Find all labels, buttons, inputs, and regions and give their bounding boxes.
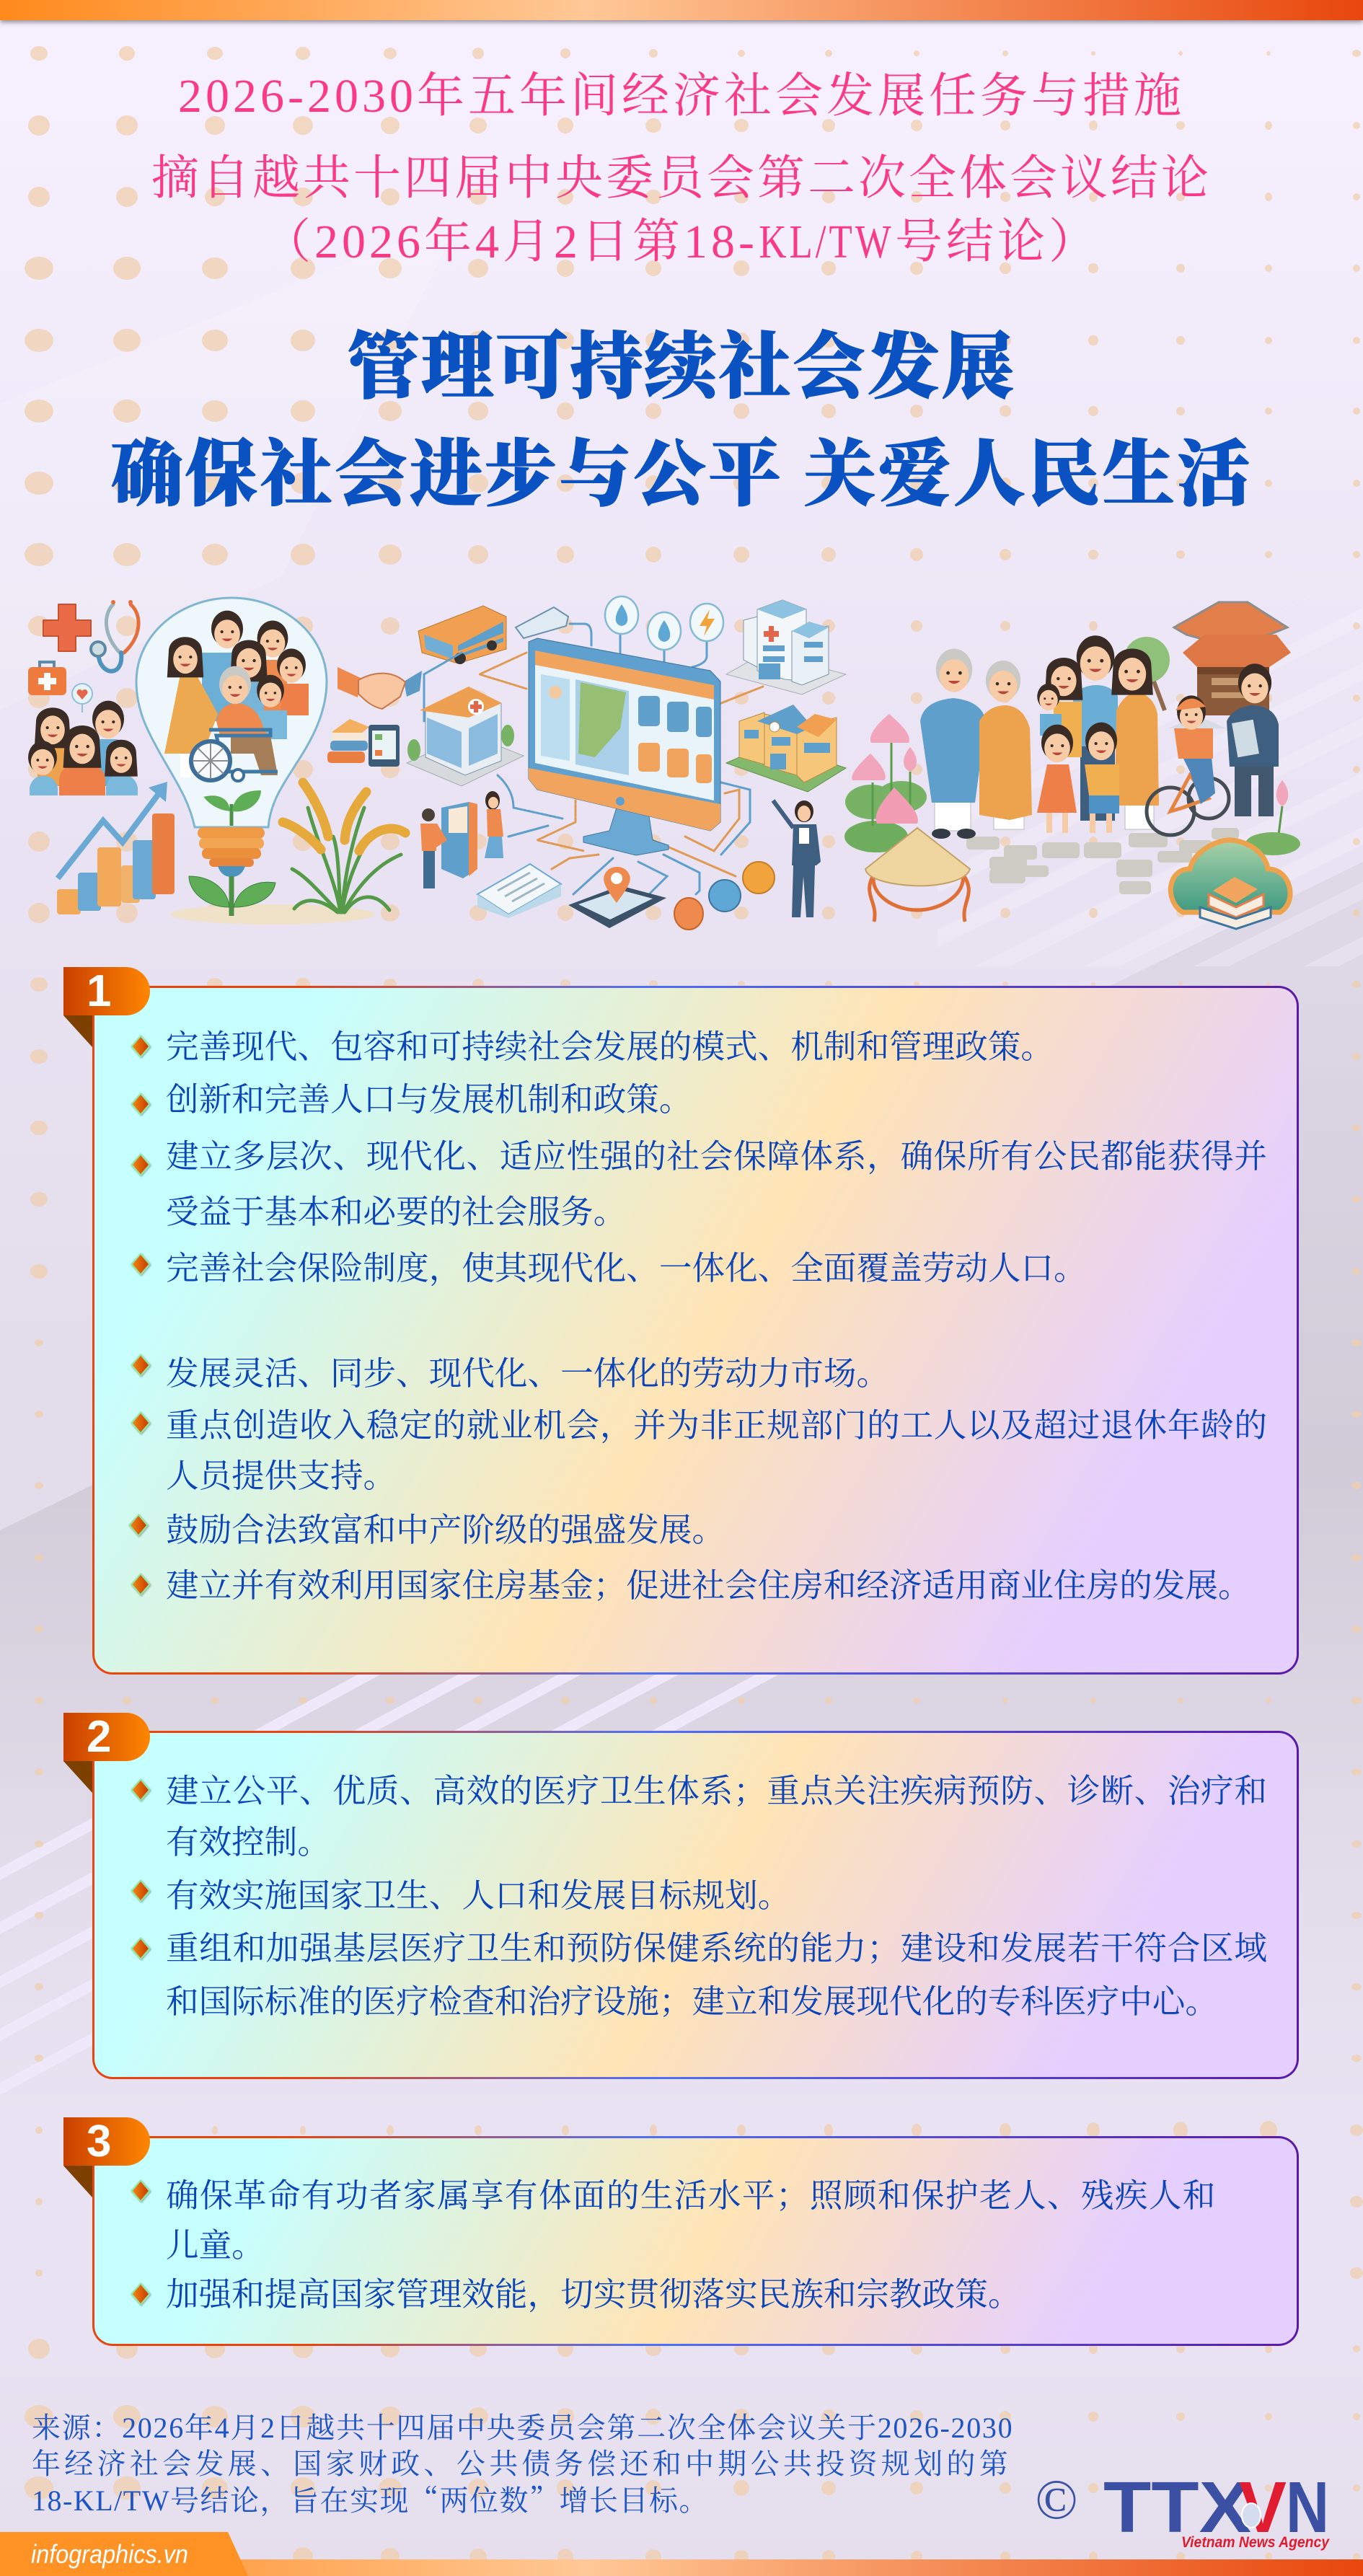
item 7 text: 鼓励合法致富和中产阶级的强盛发展。 <box>166 1512 725 1548</box>
panel 2 number badge <box>63 1713 150 1761</box>
item 1 text line 1: 建立公平、优质、高效的医疗卫生体系；重点关注疾病预防、诊断、治疗和 <box>166 1773 1268 1809</box>
bottom orange bar <box>0 2559 1363 2576</box>
bullet 2 <box>131 1093 152 1116</box>
bullet 7 <box>128 1514 150 1538</box>
website label: infographics.vn <box>31 2539 188 2569</box>
item 1 text line 2: 有效控制。 <box>166 1824 330 1861</box>
icon: hospital building <box>407 687 524 786</box>
title: pink subtitle lines <box>151 70 1212 268</box>
icon: man in suit with tablet <box>1227 663 1279 816</box>
icon: hospital tower <box>726 600 846 694</box>
icon: monitor dashboard <box>529 638 720 855</box>
icon: medical kit <box>28 662 66 695</box>
icon: elder man in blue ao dai <box>920 649 986 839</box>
panel 3 card background <box>92 2136 1299 2346</box>
icon: circuit lines <box>424 624 763 894</box>
item 6 text line 1: 重点创造收入稳定的就业机会，并为非正规部门的工人以及超过退休年龄的 <box>166 1407 1268 1444</box>
item 6 text line 2: 人员提供支持。 <box>166 1457 396 1494</box>
item 8 text: 建立并有效利用国家住房基金；促进社会住房和经济适用商业住房的发展。 <box>166 1567 1251 1604</box>
bullet 2 <box>131 2282 151 2306</box>
icon: kiosk and two people <box>420 791 503 888</box>
icon: left family group <box>28 701 138 795</box>
bullet 8 <box>131 1573 152 1597</box>
item 3 text line 2: 和国际标准的医疗检查和治疗设施；建立和发展现代化的专科医疗中心。 <box>166 1983 1218 2020</box>
bullet 6 <box>131 1411 152 1435</box>
bullet 1 <box>131 1778 152 1803</box>
item 5 text: 发展灵活、同步、现代化、一体化的劳动力市场。 <box>166 1355 889 1392</box>
item 2 text: 加强和提高国家管理效能，切实贯彻落实民族和宗教政策。 <box>166 2276 1020 2313</box>
title: pink subtitle lines: （2026年4月2日第18- 号结论） <box>263 216 1100 268</box>
icon: conical hat with ribbon <box>865 828 970 922</box>
icon: presenter woman <box>773 800 821 917</box>
bullet 5 <box>131 1354 152 1377</box>
panel 3 number badge: 3 <box>87 2117 111 2166</box>
icon: cloud with books <box>1170 840 1290 929</box>
panel 3 <box>63 2117 1299 2346</box>
icon: school building <box>726 705 846 792</box>
bullet 3 <box>131 1153 152 1177</box>
icon: pagoda and tree <box>1124 602 1291 728</box>
icon: boy in yellow shirt <box>1085 723 1119 833</box>
icon: paper stack <box>477 864 561 918</box>
item 1 text line 1: 确保革命有功者家属享有体面的生活水平；照顾和保护老人、残疾人和 <box>166 2177 1217 2214</box>
source note: 年经济社会发展、国家财政、公共债务偿还和中期公共投资规划的第 <box>32 2448 1012 2480</box>
item 3 text line 2: 受益于基本和必要的社会服务。 <box>166 1194 626 1230</box>
bullet 4 <box>131 1253 152 1276</box>
bullet 2 <box>131 1879 152 1904</box>
item 4 text: 完善社会保险制度，使其现代化、一体化、全面覆盖劳动人口。 <box>166 1250 1087 1287</box>
bullet 3 <box>131 1937 152 1962</box>
bullet 1 <box>131 2179 151 2202</box>
top orange bar <box>0 0 1363 20</box>
item 2 text: 有效实施国家卫生、人口和发展目标规划。 <box>166 1877 790 1914</box>
icon: bulb base <box>198 827 265 877</box>
icon: mother in ao dai <box>1111 648 1159 829</box>
item 1 text: 完善现代、包容和可持续社会发展的模式、机制和管理政策。 <box>166 1028 1054 1065</box>
website tab <box>0 2532 248 2576</box>
icon: ground and seedling <box>170 876 375 925</box>
icon: handshake <box>338 667 422 709</box>
item 3 text line 1: 建立多层次、现代化、适应性强的社会保障体系，确保所有公民都能获得并 <box>166 1138 1268 1175</box>
title: pink subtitle lines: 2026-2030年五年间经济社会发展任务与措施 <box>178 70 1185 123</box>
bullet 1 <box>131 1035 152 1059</box>
icon: books and tablet <box>327 719 400 767</box>
icon: heart balloon <box>72 684 92 713</box>
icon: coins <box>674 862 775 930</box>
icon: tablet with location pin <box>568 867 666 928</box>
icon: girl in orange dress <box>1037 725 1077 833</box>
icon: rice plant <box>283 782 405 912</box>
icon: boy on bicycle <box>1147 695 1229 835</box>
title: pink subtitle lines: KL/TW <box>759 216 894 268</box>
illustration banner <box>28 596 1300 930</box>
panel 3 badge fold <box>63 2166 92 2197</box>
source note: 18-KL/TW号结论，旨在实现“两位数”增长目标。 <box>32 2478 709 2519</box>
item 2 text: 创新和完善人口与发展机制和政策。 <box>166 1081 692 1118</box>
panel 2 card background <box>92 1731 1299 2079</box>
heading: main blue title: 确保社会进步与公平 关爱人民生活 <box>111 435 1252 515</box>
panel 3 number badge <box>63 2117 150 2166</box>
panel 1 number badge <box>63 967 150 1015</box>
panel 1 number badge: 1 <box>87 966 111 1016</box>
bar chart with rising arrow <box>57 782 175 914</box>
icon: elder woman in orange ao dai <box>979 661 1032 829</box>
icon: water drops and lightning balloons <box>605 596 723 650</box>
panel 1 badge fold <box>63 1015 92 1047</box>
icon: stethoscope <box>91 600 138 671</box>
icon: medical cross <box>43 604 91 651</box>
panel 1 card background <box>92 986 1299 1675</box>
source note <box>0 2410 1024 2518</box>
heading: main blue title <box>111 327 1252 515</box>
icon: train <box>516 607 568 638</box>
icon: right lotus <box>1245 780 1300 855</box>
heading: main blue title: 管理可持续社会发展 <box>348 327 1015 407</box>
panel 2 <box>63 1712 1299 2079</box>
item 3 text line 1: 重组和加强基层医疗卫生和预防保健系统的能力；建设和发展若干符合区域 <box>166 1930 1268 1967</box>
icon: paving stones <box>966 828 1239 894</box>
icon: lotus pond <box>844 714 927 852</box>
source note: 来源：2026年4月2日越共十四届中央委员会第二次全体会议关于2026-2030 <box>32 2412 1013 2444</box>
icon: father and mother with baby <box>1037 635 1118 821</box>
panel 2 badge fold <box>63 1761 92 1793</box>
panel 2 number badge: 2 <box>87 1712 111 1762</box>
icon: bus <box>418 606 506 664</box>
panel 1 <box>63 966 1299 1675</box>
icon: light bulb with family in wheelchair <box>136 598 327 827</box>
item 1 text line 2: 儿童。 <box>166 2227 265 2264</box>
title: pink subtitle lines: 摘自越共十四届中央委员会第二次全体会议结论 <box>151 152 1212 205</box>
logo: TTXVN <box>1031 2475 1334 2554</box>
